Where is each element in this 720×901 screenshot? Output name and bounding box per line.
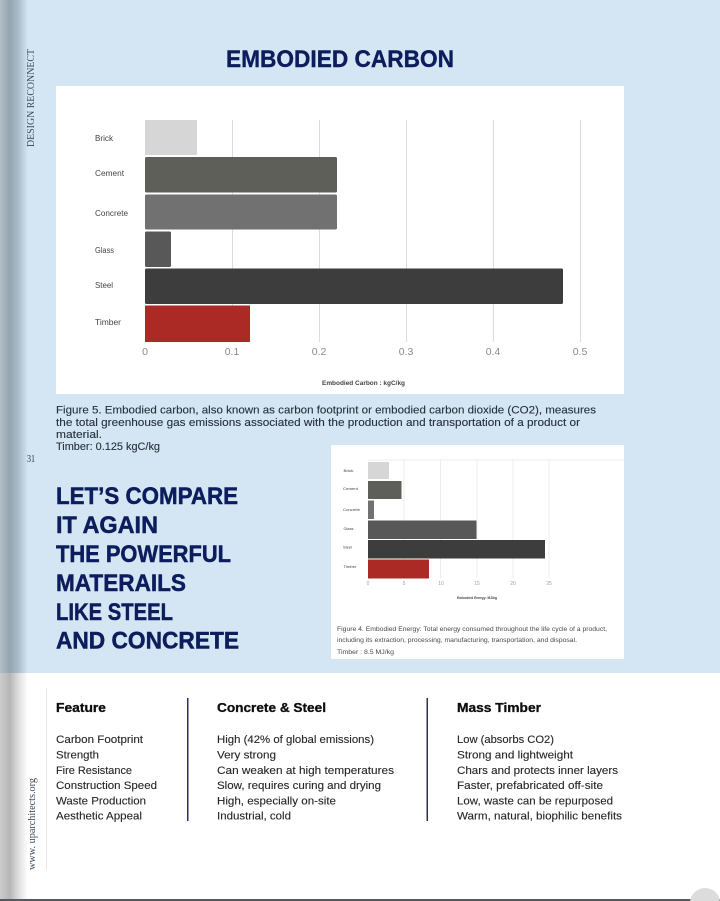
column: feature: Aesthetic Appeal [56,810,142,822]
caption: figure 5 [56,404,597,453]
caption: figure 5: Timber: 0.125 kgC/kg [56,441,160,453]
column: concrete and steel: Slow, requires curing and drying [217,780,381,792]
heading: compare: MATERAILS [56,570,186,597]
column: feature: Strength [56,750,99,762]
panel: embodied energy chart [331,445,624,659]
caption: figure 4: Timber : 8.5 MJ/kg [337,649,395,656]
energy chart axis tick labels: 0 [367,581,370,587]
white lower section [0,673,720,901]
chart category labels: Glass [95,246,114,255]
energy chart category labels: Timber [344,564,357,569]
column: feature: Carbon Footprint [56,734,143,746]
chart axis tick labels: 0.3 [399,346,413,358]
panel: embodied carbon chart [56,86,624,394]
page background [0,0,720,673]
energy chart category labels: Glass [344,526,354,531]
chart axis tick labels: 0.1 [225,346,239,358]
energy chart axis tick labels: 25 [546,581,552,587]
bar chart: carbon bars [145,120,563,342]
title: EMBODIED CARBON [226,46,454,73]
chart axis tick labels: 0.2 [312,346,326,358]
heading: compare [56,483,239,654]
energy chart category labels [343,468,361,569]
energy chart category labels: Brick [344,468,354,473]
light vertical rule beside table [46,688,47,870]
heading: compare: THE POWERFUL [56,541,231,568]
chart axis tick labels: 0.4 [486,346,500,358]
heading: compare: IT AGAIN [56,512,158,539]
column: feature [56,700,157,822]
column: concrete and steel: Industrial, cold [217,810,291,822]
column: mass timber: Low, waste can be repurposed [457,796,613,808]
book spine shading, lower [0,673,28,901]
chart axis tick labels [142,346,587,358]
caption: figure 5: the total greenhouse gas emissions associated with the production and transportation of a product or [56,417,580,429]
energy chart axis tick labels [367,581,552,587]
caption: figure 4: including its extraction, processing, manufacturing, transportation, and disposal. [337,637,577,644]
column: mass timber: Low (absorbs CO2) [457,734,554,746]
caption: figure 4: Figure 4. Embodied Energy: Total energy consumed throughout the life cycle of a product, [337,626,607,633]
column: concrete and steel: High, especially on-site [217,796,336,808]
column: mass timber: Mass Timber [457,700,541,715]
comparison table [56,698,623,822]
heading: compare: LIKE STEEL [56,599,173,626]
energy chart category labels: Steel [343,544,352,550]
column: concrete and steel [217,700,395,822]
energy chart axis title: Embodied Energy: MJ/kg [457,596,498,600]
caption: figure 4 [337,626,607,656]
chart axis title: Embodied Carbon : kgC/kg [322,381,405,387]
column: mass timber [457,700,623,822]
chart category labels: Cement [95,169,125,178]
bottom page edge line [0,899,720,901]
sidebar text: website: www. uparchitects.org [27,777,38,870]
chart category labels: Concrete [95,209,129,218]
energy chart axis tick labels: 20 [510,581,516,587]
energy chart category labels: Cement [343,486,359,491]
divider [187,698,188,821]
corner badge [690,888,720,901]
column: concrete and steel: Very strong [217,750,276,762]
divider [426,698,428,821]
chart axis tick labels: 0.5 [573,346,587,358]
sidebar text: publication name: DESIGN RECONNECT [26,49,37,147]
heading: compare: AND CONCRETE [56,628,239,654]
column: feature: Waste Production [56,796,146,808]
energy chart axis tick labels: 5 [403,581,406,587]
caption: figure 5: material. [56,429,102,441]
chart axis tick labels: 0 [142,346,148,358]
chart category labels: Timber [95,318,121,327]
column: mass timber: Strong and lightweight [457,750,573,762]
page number: 31 [27,454,35,465]
column: feature: Construction Speed [56,780,157,792]
chart category labels: Steel [95,281,113,290]
energy chart category labels: Concrete [343,507,361,512]
heading: compare: LET’S COMPARE [56,483,238,510]
caption: figure 5: Figure 5. Embodied carbon, also known as carbon footprint or embodied carbon dioxide (CO2), measures [56,404,597,416]
chart category labels: Brick [95,134,114,143]
column: feature: Feature [56,700,106,715]
column: mass timber: Chars and protects inner layers [457,765,619,777]
energy chart grid lines [368,460,624,578]
energy chart axis tick labels: 10 [438,581,444,587]
column: mass timber: Faster, prefabricated off-site [457,780,603,792]
column: mass timber: Warm, natural, biophilic benefits [457,810,623,822]
chart category labels [95,134,129,327]
column: concrete and steel: Can weaken at high temperatures [217,765,395,777]
bar chart: energy bars [368,462,545,578]
column: concrete and steel: High (42% of global emissions) [217,734,374,746]
chart grid lines [232,120,580,342]
energy chart axis tick labels: 15 [474,581,480,587]
book spine shading, upper [0,0,28,673]
column: feature: Fire Resistance [56,765,132,777]
column: concrete and steel: Concrete & Steel [217,700,326,715]
